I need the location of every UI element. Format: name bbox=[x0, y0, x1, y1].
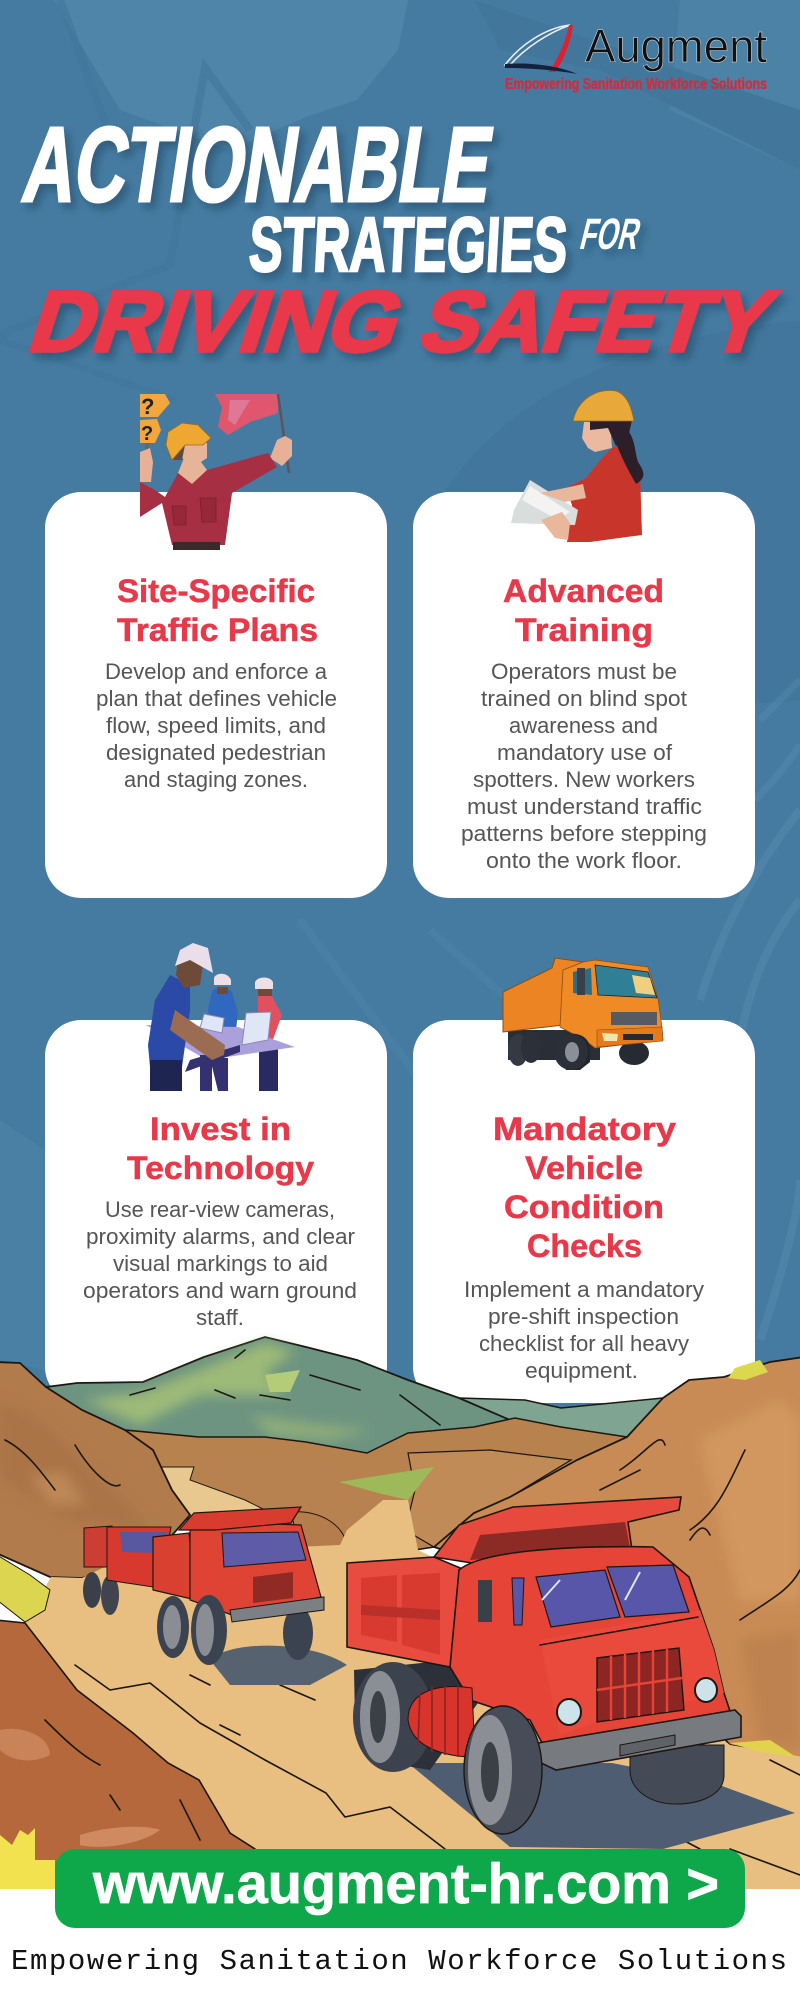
right hill bbox=[434, 1357, 800, 1760]
icon: flagger worker bbox=[140, 394, 292, 550]
card body: mandatory use of bbox=[497, 740, 673, 765]
distant mountains bbox=[46, 1337, 663, 1470]
left hill bbox=[0, 1362, 190, 1578]
yellow grass bottom left bbox=[0, 1828, 55, 1889]
card body: pre-shift inspection bbox=[488, 1304, 679, 1329]
card body: must understand traffic bbox=[467, 794, 702, 819]
title line: driving safety: DRIVING SAFETY bbox=[19, 273, 787, 370]
panel: invest in technology bbox=[45, 943, 387, 1403]
card body: spotters. New workers bbox=[473, 767, 695, 792]
card body: Operators must be bbox=[491, 659, 677, 684]
title word: for: FOR bbox=[576, 211, 646, 259]
mid hills bbox=[125, 1418, 627, 1560]
card body bbox=[96, 659, 337, 792]
card heading: Traffic Plans bbox=[117, 612, 318, 648]
fender bbox=[408, 1687, 475, 1757]
card body: and staging zones. bbox=[124, 767, 308, 792]
card body bbox=[83, 1197, 357, 1330]
card body: designated pedestrian bbox=[106, 740, 326, 765]
card body: operators and warn ground bbox=[83, 1278, 357, 1303]
cab bbox=[450, 1547, 738, 1770]
card body: Implement a mandatory bbox=[464, 1277, 704, 1302]
grille bbox=[597, 1648, 684, 1722]
distant road bbox=[138, 1467, 265, 1535]
card heading bbox=[493, 1111, 676, 1264]
card heading: Mandatory bbox=[493, 1111, 676, 1147]
card body: patterns before stepping bbox=[461, 821, 707, 846]
lower left slope bbox=[0, 1620, 270, 1889]
yellow grass on right ridge bbox=[728, 1360, 768, 1380]
card heading: Training bbox=[515, 612, 653, 648]
road cracks bbox=[75, 1665, 445, 1849]
card heading bbox=[503, 573, 664, 648]
card heading: Technology bbox=[127, 1150, 314, 1186]
website button: www.augment-hr.com > bbox=[92, 1852, 719, 1916]
road bbox=[25, 1500, 800, 1889]
yellow bush bbox=[0, 1555, 50, 1622]
icon: sail bbox=[505, 25, 577, 74]
card body: checklist for all heavy bbox=[479, 1331, 689, 1356]
card heading: Vehicle bbox=[525, 1150, 643, 1186]
headlights bbox=[557, 1699, 581, 1725]
footer tagline: Empowering Sanitation Workforce Solutions bbox=[11, 1945, 787, 1978]
logo bbox=[505, 20, 767, 93]
windshield bbox=[536, 1570, 620, 1627]
icon: flagger worker: ? bbox=[141, 423, 153, 445]
title bbox=[17, 106, 787, 370]
card body: proximity alarms, and clear bbox=[86, 1224, 355, 1249]
card heading: Advanced bbox=[503, 573, 664, 609]
card body: Develop and enforce a bbox=[105, 659, 328, 684]
icon: flagger worker: ? bbox=[141, 394, 154, 419]
title line: strategies: STRATEGIES bbox=[247, 202, 570, 288]
card body: awareness and bbox=[509, 713, 658, 738]
brand name: Augment bbox=[585, 20, 767, 72]
card heading: Condition bbox=[504, 1189, 664, 1225]
card body: plan that defines vehicle bbox=[96, 686, 337, 711]
card body: Use rear-view cameras, bbox=[105, 1197, 335, 1222]
grass right bbox=[730, 1740, 796, 1757]
card heading: Site-Specific bbox=[117, 573, 315, 609]
title line: actionable: ACTIONABLE bbox=[17, 106, 500, 224]
panel: site-specific traffic plans bbox=[45, 394, 387, 898]
footer area bbox=[0, 1849, 800, 2000]
side mirror bbox=[478, 1580, 492, 1622]
grass patch bbox=[339, 1467, 434, 1500]
panel: advanced training bbox=[413, 390, 755, 898]
icon: workers with laptops bbox=[146, 943, 295, 1091]
front wheel bbox=[464, 1706, 542, 1834]
shadow bbox=[408, 1763, 795, 1849]
card body: flow, speed limits, and bbox=[106, 713, 326, 738]
card heading bbox=[127, 1111, 314, 1186]
dump bed bbox=[347, 1557, 465, 1667]
background bbox=[0, 0, 800, 1500]
card body: onto the work floor. bbox=[486, 848, 682, 873]
card body bbox=[464, 1277, 704, 1383]
card body bbox=[461, 659, 707, 873]
icon: worker with documents bbox=[511, 390, 643, 542]
card body: equipment. bbox=[525, 1358, 638, 1383]
card heading: Checks bbox=[527, 1228, 642, 1264]
canopy bbox=[434, 1497, 681, 1565]
panel: mandatory vehicle condition checks bbox=[413, 958, 755, 1403]
landscape illustration bbox=[0, 1337, 800, 1889]
card heading: Invest in bbox=[150, 1111, 291, 1147]
truck: large front bbox=[347, 1497, 795, 1849]
card body: visual markings to aid bbox=[113, 1251, 328, 1276]
truck: back bbox=[83, 1526, 171, 1615]
card body: trained on blind spot bbox=[481, 686, 687, 711]
bumper bbox=[538, 1710, 741, 1770]
truck: middle bbox=[153, 1507, 347, 1685]
icon: orange truck bbox=[503, 958, 663, 1070]
card body: staff. bbox=[196, 1305, 244, 1330]
card heading bbox=[117, 573, 318, 648]
